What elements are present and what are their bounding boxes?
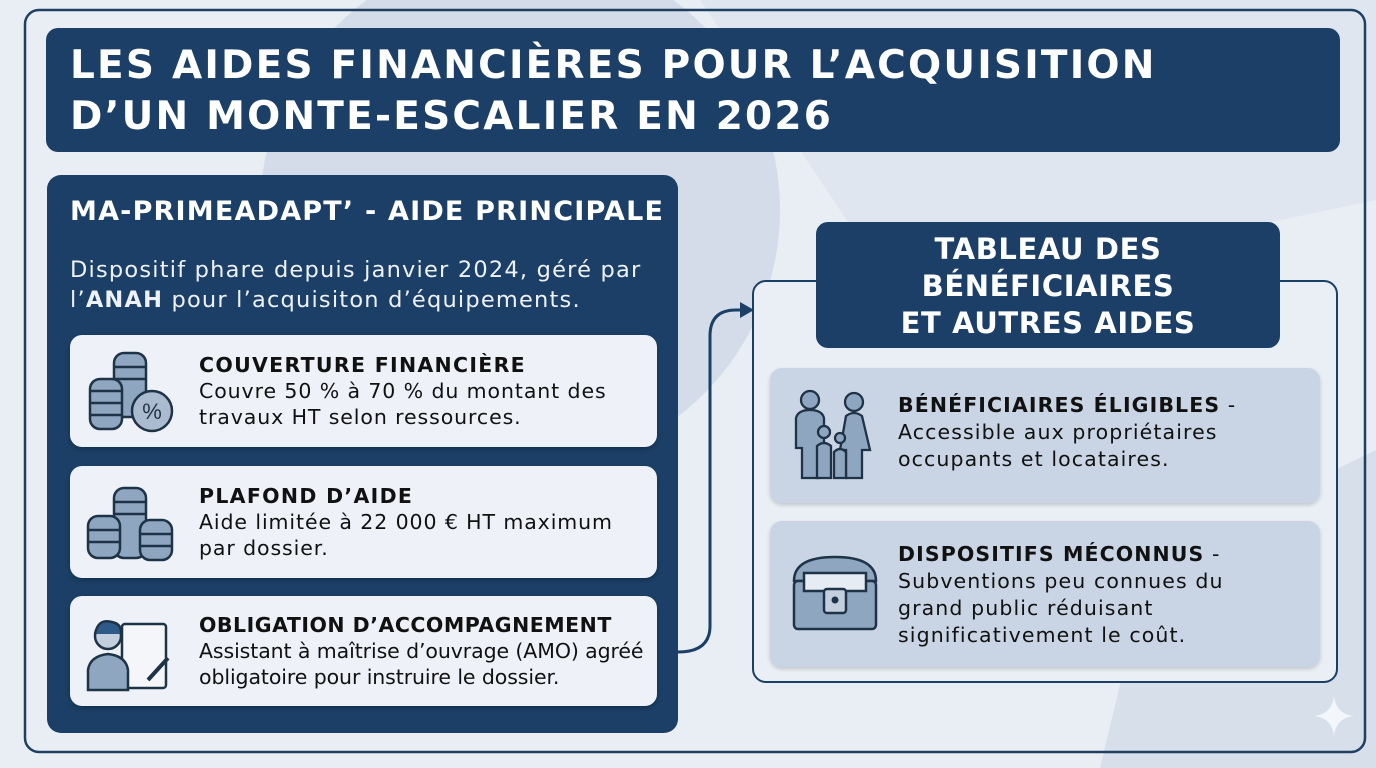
card: beneficiaires: BÉNÉFICIAIRES ÉLIGIBLES - <box>898 393 1236 417</box>
card: plafond <box>70 466 657 578</box>
description: Dispositif phare depuis janvier 2024, géré par <box>70 257 641 283</box>
card: dispositifs: DISPOSITIFS MÉCONNUS - <box>898 542 1220 566</box>
arrow: connector <box>678 302 752 654</box>
card: obligation <box>70 596 657 706</box>
card: obligation: Assistant à maîtrise d’ouvrage (AMO) agréé <box>199 639 643 663</box>
card: plafond: PLAFOND D’AIDE <box>199 484 413 508</box>
card: plafond: par dossier. <box>199 536 329 560</box>
card: plafond: Aide limitée à 22 000 € HT maximum <box>199 510 613 534</box>
heading: tableau: TABLEAU DES <box>935 232 1161 266</box>
card: beneficiaires: Accessible aux propriétaires <box>898 420 1218 444</box>
icon: family <box>794 390 872 480</box>
heading: tableau <box>816 222 1280 348</box>
icon: coins with percent: % <box>142 399 162 424</box>
heading: tableau: BÉNÉFICIAIRES <box>922 269 1174 303</box>
card: dispositifs <box>770 521 1320 667</box>
card: dispositifs: significativement le coût. <box>898 623 1186 647</box>
card: couverture: COUVERTURE FINANCIÈRE <box>199 353 526 377</box>
panel heading: MA-PRIMEADAPT’ - AIDE PRINCIPALE <box>70 196 664 227</box>
title <box>46 28 1340 152</box>
icon: treasure chest <box>792 556 878 630</box>
card: dispositifs: grand public réduisant <box>898 596 1154 620</box>
icon: coin stacks <box>86 486 174 562</box>
card: obligation: obligatoire pour instruire le dossier. <box>199 665 559 689</box>
card: couverture: travaux HT selon ressources. <box>199 405 522 429</box>
icon: sparkle <box>1315 697 1353 735</box>
description: l’ANAH pour l’acquisiton d’équipements. <box>70 287 581 313</box>
heading: tableau: ET AUTRES AIDES <box>901 306 1195 340</box>
panel: beneficiaries <box>752 280 1338 683</box>
title: D’UN MONTE-ESCALIER EN 2026 <box>70 94 833 139</box>
card: dispositifs: Subventions peu connues du <box>898 569 1224 593</box>
card: couverture: Couvre 50 % à 70 % du montant des <box>199 379 607 403</box>
icon: coins with percent <box>88 352 174 432</box>
card: obligation: OBLIGATION D’ACCOMPAGNEMENT <box>199 613 612 637</box>
card: beneficiaires <box>770 368 1320 503</box>
card: beneficiaires: occupants et locataires. <box>898 447 1170 471</box>
icon: advisor with document <box>86 620 170 692</box>
card: couverture <box>70 335 657 447</box>
description <box>70 257 641 313</box>
panel: ma-primeadapt <box>47 175 678 733</box>
title: LES AIDES FINANCIÈRES POUR L’ACQUISITION <box>70 43 1157 88</box>
